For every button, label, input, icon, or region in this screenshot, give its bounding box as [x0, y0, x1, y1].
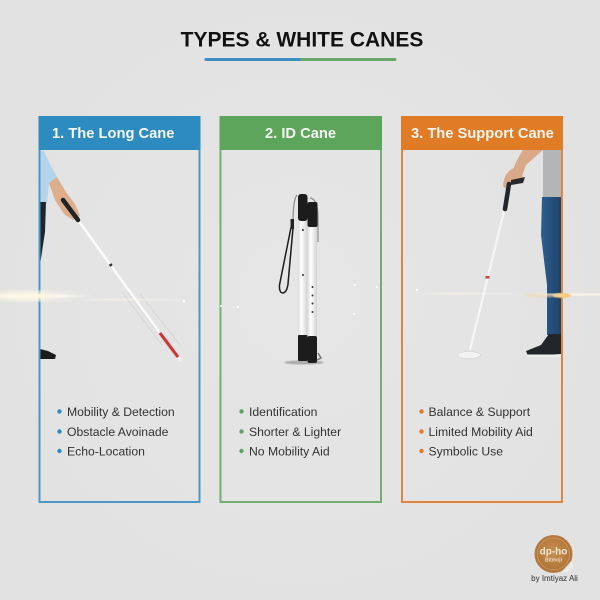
logo badge — [535, 536, 574, 573]
feature list — [239, 405, 341, 458]
panel header — [220, 116, 382, 150]
panel frame — [402, 117, 562, 502]
feature list — [419, 405, 533, 458]
panel: id cane — [220, 116, 382, 502]
long cane — [63, 200, 181, 361]
lens flare streak — [0, 284, 600, 315]
feature list: Balance & Support — [428, 405, 531, 419]
logo badge: Bitmoji — [545, 558, 563, 564]
title underline — [204, 58, 396, 61]
feature list — [57, 405, 175, 458]
id cane — [279, 194, 324, 364]
feature list: Mobility & Detection — [67, 405, 175, 419]
feature list: Shorter & Lighter — [249, 425, 341, 439]
panel header — [401, 116, 563, 150]
feature list: Identification — [249, 405, 317, 419]
feature list: Symbolic Use — [428, 444, 503, 458]
person: arm, torso and legs — [503, 150, 561, 357]
feature list: No Mobility Aid — [249, 444, 330, 458]
panel: the long cane — [38, 116, 200, 502]
panel frame — [220, 117, 381, 502]
support cane — [458, 177, 525, 358]
feature list: Limited Mobility Aid — [428, 425, 533, 439]
person: arm and legs — [40, 151, 80, 359]
panel header: 2. ID Cane — [265, 126, 336, 142]
logo badge: dp-ho — [540, 546, 567, 558]
title: TYPES & WHITE CANES — [181, 28, 423, 52]
panel: support cane — [401, 116, 563, 502]
panel frame — [40, 117, 200, 502]
feature list: Echo-Location — [67, 444, 145, 458]
panel header — [38, 116, 200, 150]
feature list: Obstacle Avoinade — [67, 425, 169, 439]
panel header: 1. The Long Cane — [52, 126, 174, 142]
byline: by Imtiyaz Ali — [531, 574, 578, 583]
panel header: 3. The Support Cane — [411, 126, 554, 142]
